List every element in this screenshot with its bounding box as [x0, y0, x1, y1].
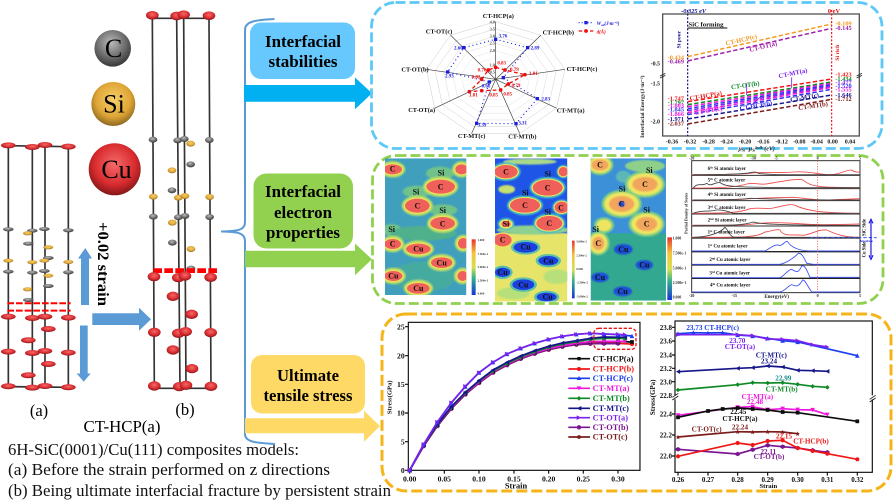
partial density of states chart: Partial Density of States [683, 192, 688, 234]
caption text: 6H-SiC(0001)/Cu(111) composites models: [8, 440, 299, 459]
partial density of states chart: -5 [774, 156, 778, 161]
caption text [8, 440, 391, 500]
heatmap: charge density difference 2: Cu [498, 268, 508, 277]
heatmap: electron localization function 1: 2.500e-1 [478, 278, 489, 282]
heatmap: electron localization function 1: 5.000e-1 [478, 265, 489, 269]
interfacial energy chart: -1.555 [835, 87, 852, 94]
stress strain chart: 0 [401, 466, 405, 475]
heading box: ultimate tensile stress [251, 355, 365, 414]
zoomed stress chart: 23.4 [660, 352, 672, 360]
atomic model (b) [146, 10, 217, 391]
radar chart: 2.89 [531, 47, 540, 52]
partial density of states chart: 5ᵗʰ C atomic layer [708, 177, 746, 183]
partial density of states chart: -20 [689, 293, 694, 298]
heatmap: electron localization function 3: Cu [618, 287, 628, 296]
label: CT-HCP(a): CT-HCP(a) [84, 417, 160, 436]
radar chart: CT-OT(c) [426, 28, 452, 35]
interfacial energy chart: -0.16 [757, 139, 770, 145]
zoomed stress chart: 22.15 [776, 433, 792, 441]
interfacial energy chart: CT-MT(a) [778, 67, 808, 80]
partial density of states chart: Cu Side [863, 242, 868, 257]
radar chart: 0.5 [490, 69, 495, 74]
partial density of states chart: 0 [817, 293, 819, 298]
heading box: interfacial stabilities: Interfacial [265, 32, 341, 51]
colourbar labels for third heatmap [673, 236, 686, 300]
interfacial energy chart: -0.20 [739, 139, 751, 145]
radar chart: CT-OT(a) [408, 107, 435, 114]
heading box: interfacial stabilities [250, 22, 355, 79]
heatmap: charge density difference 2: C [546, 219, 552, 228]
partial density of states chart: 2ⁿᵈ Cu atomic layer [709, 257, 751, 263]
zoomed stress chart: 23.73 CT-HCP(c) [686, 324, 740, 332]
interfacial energy chart: -2.0 [651, 119, 660, 125]
heading box: interfacial stabilities: stabilities [268, 52, 338, 71]
radar chart: 2.83 [541, 97, 551, 102]
heatmap: electron localization function 1: C [390, 165, 396, 174]
arrow: model a to model b [92, 308, 151, 331]
interfacial energy chart: -1.845 [668, 106, 684, 113]
radar chart: 2.0 [490, 48, 495, 53]
label: b: (b) [175, 400, 195, 419]
heatmap: charge density difference 2: 5.000e-2 [576, 240, 587, 244]
heatmap: electron localization function 3: C [619, 200, 625, 209]
heading box: interfacial electron properties: properties [266, 223, 341, 242]
zoomed stress chart: 23.70 [729, 337, 746, 345]
stress strain chart: CT-MT(c) [593, 404, 629, 413]
zoomed stress chart: 22.45 [730, 408, 747, 416]
heatmap: electron localization function 1: Si [438, 168, 445, 177]
zoomed stress chart: Stress(GPa) [649, 379, 657, 415]
zoomed stress chart: 22.2 [660, 432, 672, 440]
partial density of states chart: 6ᵗʰ Si atomic layer [708, 166, 747, 172]
zoomed stress chart: CT-HCP(a) [722, 415, 758, 423]
radar chart: 2.5 [490, 41, 495, 46]
stress strain chart: 0.05 [438, 474, 451, 483]
heading box: interfacial electron properties: electron [274, 203, 332, 222]
heatmap: electron localization function 3: C [644, 220, 650, 229]
radar chart [401, 13, 620, 141]
zoomed stress chart: CT-OT(a) [725, 343, 756, 351]
partial density of states chart: 3ʳᵈ C atomic layer [708, 205, 746, 211]
legend: atom spheres [89, 30, 141, 195]
interfacial energy chart: -1.646 [835, 92, 852, 99]
interfacial energy chart: -1.747 [668, 95, 685, 102]
stress strain chart: CT-HCP(c) [593, 374, 633, 383]
partial density of states chart: 2ⁿᵈ Si atomic layer [708, 217, 747, 223]
zoomed stress chart: 23.6 [660, 338, 672, 346]
interfacial energy chart: -1.434 [835, 76, 852, 83]
partial density of states chart: 4ᵗʰ Si atomic layer [708, 192, 747, 198]
brace [221, 19, 274, 444]
partial density of states chart: 3ʳᵈ Cu atomic layer [709, 271, 751, 277]
radar chart: 2.93 [445, 75, 454, 80]
stress strain chart: 20 [397, 351, 405, 360]
zoomed stress chart: CT-MT(b) [766, 386, 798, 394]
interfacial energy chart: -0.109 [835, 21, 852, 28]
heatmap: electron localization function 1: C [440, 219, 446, 228]
radar chart: 1.0 [490, 62, 495, 67]
interfacial energy chart: -0.434 [668, 54, 685, 61]
heatmap: electron localization function 1: 7.500e-1 [478, 252, 489, 256]
zoomed stress chart: 23.8 [660, 324, 672, 332]
arrow: strain up [78, 248, 92, 305]
legend: atom spheres: Si [103, 90, 125, 118]
heatmap: charge density difference 2: C [558, 203, 564, 212]
heatmap: charge density difference 2: Cu [521, 243, 531, 252]
radar chart: 3.0 [490, 34, 495, 39]
radar chart: CT-HCP(a) [483, 13, 514, 20]
zoomed stress chart: 22.8 [660, 392, 672, 400]
heatmap: electron localization function 1: Si [388, 225, 396, 234]
heatmap: electron localization function 3: Si [643, 205, 651, 214]
stress strain chart: CT-HCP(a) [593, 354, 634, 363]
radar chart: 0.79 [512, 84, 521, 89]
zoomed stress chart: 0.30 [792, 476, 804, 484]
interfacial energy chart: (eV) [763, 146, 775, 153]
interfacial energy chart: μ [738, 147, 742, 153]
zoomed stress chart: CT-MT(c) [756, 351, 788, 359]
interfacial energy chart: -1.971 [668, 116, 684, 123]
stress strain chart: 0.30 [611, 474, 625, 483]
stress strain chart: CT-MT(a) [593, 384, 630, 393]
radar chart: 4.0 [490, 19, 495, 24]
interfacial energy chart: Interfacial Energy(J·m⁻²) [639, 75, 646, 138]
stress strain chart: 15 [397, 380, 405, 389]
heatmap: charge density difference 2: 2.500e-2 [576, 253, 587, 257]
radar chart: ad [601, 23, 605, 27]
interfacial energy chart: -0.04 [810, 139, 823, 145]
interfacial energy chart: -0.24 [720, 139, 733, 145]
radar chart: 0.83 [497, 61, 507, 66]
heatmap: charge density difference 2: C [503, 167, 509, 176]
heatmap: electron localization function 1: Cu [413, 284, 424, 293]
zoomed stress chart: 22.11 [760, 448, 777, 456]
interfacial energy chart: -0.32 [684, 139, 696, 145]
zoomed stress chart: 23.24 [761, 358, 777, 366]
stress strain chart: 0.10 [472, 474, 486, 483]
stress strain chart: 0.15 [507, 474, 521, 483]
interfacial energy chart: CT-MT(c) [790, 92, 820, 104]
interfacial energy chart: -1.5 [651, 82, 660, 88]
heatmap: electron localization function 3: C [642, 180, 648, 189]
interfacial energy chart: SiC forming [689, 21, 724, 28]
stress strain chart: 10 [397, 409, 405, 418]
heatmap: charge density difference 2: Si [503, 219, 510, 228]
interfacial energy chart: −μ [745, 147, 753, 153]
radar chart: 0.76 [478, 68, 487, 73]
heatmap: charge density difference 2: -5.000e-2 [576, 294, 588, 298]
zoomed stress chart: 0.32 [851, 476, 864, 484]
label: strain: +0.02 strain [94, 222, 111, 306]
partial density of states chart: 5 [859, 156, 861, 161]
heatmap: electron localization function 1: C [390, 239, 396, 248]
interfacial energy chart: -1.520 [835, 83, 852, 90]
heading box: ultimate tensile stress: Ultimate [277, 366, 339, 385]
interfacial energy chart: -1.423 [835, 72, 852, 79]
heatmap: electron localization function 3: C [595, 239, 601, 248]
radar chart: 3.39 [478, 123, 487, 128]
interfacial energy chart: -2.037 [668, 121, 685, 128]
interfacial energy chart: CT-OT(b) [731, 80, 760, 91]
partial density of states chart: SiC Side [863, 219, 868, 236]
partial density of states chart: -20 [689, 156, 694, 161]
partial density of states chart: Interface [860, 239, 873, 243]
radar chart: 3.5 [490, 26, 495, 31]
interfacial energy chart: Si [742, 148, 746, 153]
heatmap: charge density difference 2 [491, 158, 588, 303]
zoomed stress chart: CT-OT(c) [692, 425, 722, 433]
legend: atom spheres: Cu [101, 155, 132, 184]
radar chart: 0.85 [489, 93, 499, 98]
atomic model (a) [1, 142, 76, 391]
interfacial energy chart: Si rich [835, 44, 841, 61]
heatmap: electron localization function 1: C [438, 183, 444, 192]
heatmap: charge density difference 2: C [545, 183, 551, 192]
interfacial energy chart: -1.797 [668, 100, 685, 107]
radar chart: CT-HCP(b) [543, 30, 574, 37]
radar chart: CT-MT(b) [508, 134, 536, 141]
radar chart: 0.82 [472, 76, 481, 81]
stress strain chart: CT-OT(a) [593, 413, 628, 422]
interfacial energy chart: -0.325 eV [681, 8, 707, 15]
interfacial energy chart: 0 eV [828, 8, 840, 15]
interfacial energy chart: -0.12 [775, 139, 788, 145]
zoomed stress chart: CT-MT(a) [742, 393, 774, 401]
colourbar labels for third heatmap: 2.500e-1 [673, 281, 686, 285]
interfacial energy chart: -0.5 [651, 62, 660, 68]
zoomed stress chart: Strain [759, 483, 777, 490]
partial density of states chart: 1ˢᵗ C atomic layer [708, 230, 746, 235]
heatmap: charge density difference 2: 0.000 [576, 267, 584, 271]
heatmap: electron localization function 3: Cu [639, 261, 650, 270]
interfacial energy chart: bulk [755, 145, 763, 150]
heatmap: electron localization function 3 [587, 155, 672, 301]
panel: interfacial stabilities [372, 2, 882, 148]
stress strain chart: 25 [397, 322, 405, 331]
partial density of states chart: -10 [751, 156, 756, 161]
label: a: (a) [30, 401, 48, 420]
heatmap: charge density difference 2: Cu [518, 280, 529, 289]
zoomed stress chart: 0.29 [762, 476, 774, 484]
partial density of states chart: -15 [732, 293, 737, 298]
stress strain chart: 0.25 [577, 474, 590, 483]
colourbar labels for third heatmap: 7.500e-1 [673, 252, 686, 256]
colourbar labels for third heatmap: 1.000 [673, 236, 681, 240]
heatmap: charge density difference 2: Si [522, 189, 529, 198]
heatmap: electron localization function 1: 1.000 [478, 238, 485, 242]
stress strain chart: CT-HCP(b) [593, 365, 634, 374]
radar chart: (J·m⁻²) [604, 21, 620, 27]
zoomed stress chart: 0.26 [672, 476, 685, 484]
heatmap: electron localization function 1: 0.000 [478, 292, 485, 296]
heatmap: electron localization function 1: Si [413, 188, 420, 197]
heatmap: charge density difference 2: -2.500e-2 [576, 281, 588, 285]
stress strain chart: 0.00 [403, 474, 417, 483]
heading box: interfacial electron properties: Interfacial [265, 182, 341, 201]
partial density of states chart: 1ˢᵗ Cu atomic layer [708, 245, 748, 250]
heatmap: charge density difference 2: Cu [543, 293, 553, 302]
interfacial energy chart: 0.00 [827, 139, 838, 145]
interfacial energy chart: CT-OT(a) [749, 40, 778, 54]
zoomed stress chart: 0.27 [702, 476, 715, 484]
stress strain chart: 0.20 [542, 474, 556, 483]
interfacial energy chart: CT-OT(c) [694, 105, 723, 117]
interfacial energy chart: Si [752, 148, 756, 153]
heatmap: electron localization function 1: C [414, 202, 420, 211]
radar chart: 3.76 [499, 35, 508, 40]
heatmap: electron localization function 1: Cu [437, 258, 447, 267]
heatmap: electron localization function 1: Cu [413, 245, 424, 254]
heatmap: charge density difference 2: Cu [543, 256, 554, 265]
interfacial energy chart: -0.08 [793, 139, 806, 145]
heatmap: electron localization function 3: Si [592, 225, 600, 234]
panel: ultimate tensile stress [382, 314, 891, 491]
radar chart: 2.60 [454, 46, 463, 51]
heatmap: electron localization function 3: Si [646, 166, 653, 175]
heatmap: charge density difference 2: C [522, 201, 528, 210]
heatmap: electron localization function 3: Si [619, 185, 626, 194]
interfacial energy chart: CT-HCP(b) [739, 100, 773, 113]
interfacial energy chart: 0.04 [845, 139, 855, 145]
radar chart: 1.81 [469, 93, 478, 98]
radar chart: 1.81 [529, 72, 538, 77]
stress strain chart: CT-OT(b) [593, 423, 629, 432]
radar chart: 3.31 [518, 121, 528, 126]
zoomed stress chart: 22.99 [775, 375, 792, 383]
radar chart: 0.68 [482, 85, 491, 90]
heading box: ultimate tensile stress: tensile stress [264, 386, 353, 405]
interfacial energy chart: -1.477 [835, 79, 852, 86]
interfacial energy chart: -1.803 [668, 103, 684, 110]
heading box: interfacial electron properties [254, 174, 353, 248]
zoomed stress chart: 0.28 [732, 476, 744, 484]
zoomed stress chart: 22.0 [660, 453, 672, 461]
stress strain chart: 5 [401, 437, 405, 446]
arrow: electron [245, 244, 372, 275]
colourbar labels for third heatmap: 5.000e-1 [673, 266, 686, 270]
heatmap: electron localization function 1: Si [439, 206, 447, 215]
heatmap: electron localization function 1: Cu [388, 272, 399, 281]
heatmap: charge density difference 2: Si [544, 207, 552, 216]
interfacial energy chart [639, 8, 862, 153]
panel: interfacial electron properties [372, 156, 883, 304]
interfacial energy chart: CT-MT(b) [798, 101, 828, 112]
caption text: (b) Being ultimate interfacial fracture by persistent strain [8, 481, 391, 500]
zoomed stress chart: 22.24 [732, 423, 748, 431]
partial density of states chart [683, 156, 877, 300]
zoomed stress chart: CT-HCP(b) [793, 437, 829, 445]
radar chart: CT-MT(a) [557, 108, 585, 115]
arrow: stabilities [244, 78, 372, 109]
zoomed stress chart: 23.0 [660, 378, 672, 386]
stress strain chart: Strain [505, 482, 527, 491]
partial density of states chart: 4ᵗʰ Cu atomic layer [710, 282, 751, 288]
heatmap: charge density difference 2: C [500, 236, 506, 245]
radar chart: 0.79 [510, 68, 519, 73]
interfacial energy chart: -1.866 [668, 111, 684, 118]
radar chart: CT-HCP(c) [567, 66, 597, 73]
radar chart: d(Å) [597, 29, 606, 35]
arrow: strain down [77, 326, 91, 382]
interfacial energy chart: -0.145 [835, 25, 852, 32]
stress strain chart: CT-MT(b) [593, 394, 630, 403]
zoomed stress chart: 22.48 [747, 398, 763, 406]
interfacial energy chart: CT-HCP(c) [725, 34, 758, 48]
colourbar labels for third heatmap: 0.000 [673, 296, 681, 300]
interfacial energy chart: Si poor [677, 30, 683, 48]
heatmap: electron localization function 3: Cu [618, 245, 629, 254]
partial density of states chart: 5 [859, 293, 861, 298]
interfacial energy chart: -1.712 [835, 96, 852, 103]
stress strain chart [387, 322, 640, 491]
interfacial energy chart: -0.28 [702, 139, 715, 145]
stress strain chart: Stress(GPa) [387, 380, 394, 414]
zoomed stress chart: 23.2 [660, 365, 672, 373]
radar chart: 0.85 [503, 92, 513, 97]
zoomed stress chart: 0.31 [821, 476, 834, 484]
radar chart: CT-MT(c) [458, 133, 485, 140]
radar chart: W [597, 22, 601, 27]
arrow: tensile [245, 411, 380, 442]
heatmap: electron localization function 3: C [597, 161, 603, 170]
partial density of states chart: Energy(eV) [764, 295, 789, 300]
zoomed stress chart: 22.4 [660, 411, 672, 419]
interfacial energy chart: CT-HCP(a) [689, 90, 723, 103]
heatmap: charge density difference 2: Si [544, 169, 552, 178]
partial density of states chart: 0 [817, 156, 819, 161]
heatmap: electron localization function 3: Cu [595, 273, 606, 282]
heatmap: electron localization function 1 [380, 158, 489, 297]
stress strain chart: CT-OT(c) [593, 433, 628, 442]
radar chart: CT-OT(b) [401, 66, 429, 73]
caption text: (a) Before the strain performed on z directions [8, 460, 330, 479]
legend: atom spheres: C [105, 34, 122, 63]
zoomed stress chart [649, 321, 876, 490]
interfacial energy chart: -0.469 [668, 58, 684, 65]
zoomed stress chart: CT-OT(b) [754, 453, 785, 461]
interfacial energy chart: -0.36 [666, 139, 678, 145]
